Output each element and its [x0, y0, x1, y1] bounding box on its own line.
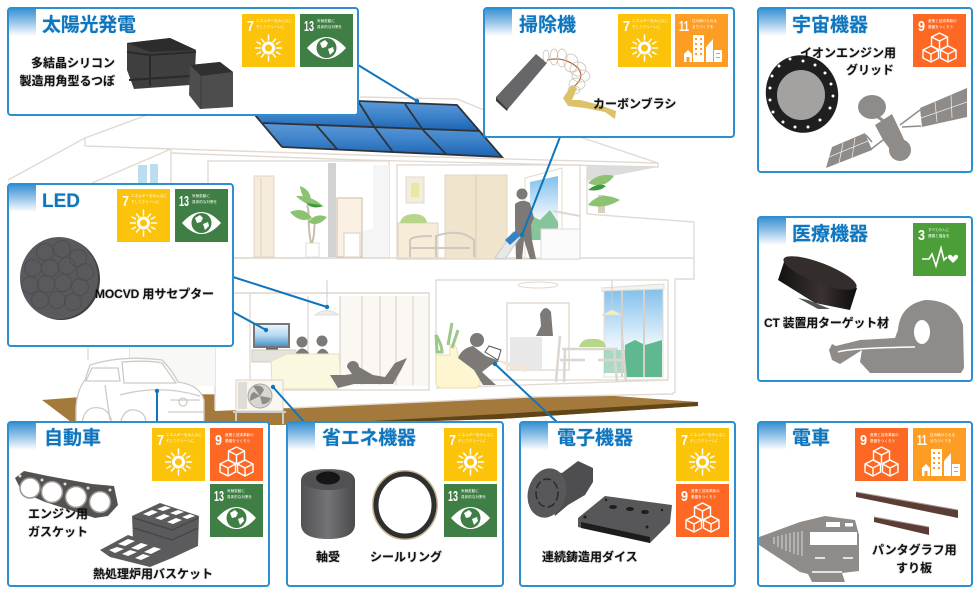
heading: medical equipment: 医療機器	[792, 223, 868, 245]
SDG 9: 産業と技術革新の	[870, 432, 899, 437]
SDG 9	[913, 14, 966, 67]
line: solar	[358, 65, 419, 103]
SDG 13	[175, 189, 228, 242]
balcony plant	[588, 175, 620, 213]
image: bearing	[301, 469, 355, 539]
dining room	[436, 280, 668, 388]
SDG 7: そしてクリーンに	[632, 24, 661, 29]
label: seal ring: シールリング	[370, 549, 442, 564]
SDG 7: 7	[247, 18, 254, 35]
SDG 7: エネルギーをみんなに	[632, 18, 668, 23]
image: seal ring	[373, 471, 437, 539]
SDG 7: エネルギーをみんなに	[458, 432, 494, 437]
SDG 9: 産業と技術革新の	[928, 18, 957, 23]
SDG 9: 9	[860, 432, 867, 449]
house walls and roof lines	[8, 97, 694, 410]
line: car	[155, 389, 159, 422]
line: vacuum	[520, 137, 560, 237]
label: gasket: エンジン用	[28, 507, 88, 521]
SDG 13: 気候変動に	[192, 193, 210, 198]
label: pantograph strip: パンタグラフ用	[872, 542, 957, 557]
label: carbon brush: カーボンブラシ	[593, 96, 676, 111]
SDG 9	[855, 428, 908, 481]
heading: solar power: 太陽光発電	[42, 14, 136, 36]
house illustration	[8, 97, 698, 425]
upper right room	[397, 165, 580, 259]
SDG 9: 基盤をつくろう	[691, 494, 716, 499]
SDG 11: 住み続けられる	[930, 432, 956, 437]
label: crucible: 多結晶シリコン	[31, 55, 115, 70]
SDG 3: 3	[918, 227, 925, 244]
person with laptop on armchair	[436, 323, 528, 388]
heading: electric train: 電車	[792, 427, 830, 449]
SDG 7: 7	[449, 432, 456, 449]
heading: energy-saving equipment: 省エネ機器	[322, 427, 416, 449]
SDG 7: エネルギーをみんなに	[166, 432, 202, 437]
SDG 13: 気候変動に	[461, 488, 479, 493]
SDG 9: 産業と技術革新の	[225, 432, 254, 437]
SDG 13: 13	[304, 18, 314, 35]
SDG 9	[210, 428, 263, 481]
SDG 11: 11	[917, 432, 927, 449]
SDG 3: すべての人に	[928, 227, 950, 232]
line: LED lamp	[233, 277, 329, 309]
SDG 9: 基盤をつくろう	[870, 438, 895, 443]
line: air conditioner	[271, 385, 305, 423]
SDG 9	[676, 484, 729, 537]
SDG 7	[117, 189, 170, 242]
panel: medical equipment	[758, 217, 972, 381]
SDG 7	[242, 14, 295, 67]
SDG 13	[444, 484, 497, 537]
heading: vacuum cleaner: 掃除機	[519, 13, 576, 36]
SDG 7: そしてクリーンに	[131, 199, 160, 204]
image: CT scanner	[829, 300, 964, 373]
SDG 11	[675, 14, 728, 67]
SDG 13: 具体的な対策を	[192, 199, 218, 204]
panel: space equipment	[757, 8, 972, 172]
image: cylindrical die	[522, 461, 593, 522]
image: heat treatment baskets	[100, 503, 199, 567]
family silhouettes and sofa	[271, 336, 407, 389]
panel: LED	[8, 184, 233, 346]
SDG 13: 13	[448, 488, 458, 505]
SDG 11: 11	[679, 18, 689, 35]
panel: electronic equipment	[520, 422, 735, 586]
SDG 7	[444, 428, 497, 481]
SDG 7	[152, 428, 205, 481]
SDG 7: 7	[122, 193, 129, 210]
heading: automobile: 自動車	[44, 427, 101, 449]
upper left room	[208, 161, 389, 258]
image: carbon brush	[496, 49, 616, 119]
SDG 7: そしてクリーンに	[166, 438, 195, 443]
image: pantograph strips	[856, 492, 958, 535]
SDG 3: 健康と福祉を	[928, 233, 950, 238]
SDG 7	[676, 428, 729, 481]
outdoor air conditioner	[233, 380, 286, 424]
label: basket: 熱処理炉用バスケット	[93, 566, 213, 581]
image: MOCVD susceptor	[20, 237, 100, 320]
SDG 9: 基盤をつくろう	[928, 24, 953, 29]
SDG 13: 具体的な対策を	[317, 24, 343, 29]
image: ion engine grid	[757, 47, 847, 141]
SDG 7: 7	[623, 18, 630, 35]
heading: space equipment: 宇宙機器	[792, 14, 868, 36]
label: bearing: 軸受	[316, 549, 340, 564]
image: train silhouette	[759, 516, 859, 582]
heading: LED: LED	[42, 191, 80, 212]
solar panels on roof	[255, 101, 502, 157]
line: LED TV	[233, 312, 268, 332]
image: engine gasket	[15, 471, 118, 518]
SDG 11: 住み続けられる	[692, 18, 718, 23]
SDG 7: そしてクリーンに	[690, 438, 719, 443]
SDG 13	[300, 14, 353, 67]
SDG 7: 7	[157, 432, 164, 449]
SDG 3	[913, 223, 966, 276]
SDG 13: 13	[214, 488, 224, 505]
SDG 13: 気候変動に	[227, 488, 245, 493]
SDG 7: 7	[681, 432, 688, 449]
heading: electronic equipment: 電子機器	[557, 427, 633, 449]
SDG 9: 9	[215, 432, 222, 449]
line: laptop	[493, 362, 558, 423]
panel: solar power	[8, 8, 358, 115]
SDG 7: そしてクリーンに	[458, 438, 487, 443]
panel: automobile	[8, 422, 269, 586]
panel: vacuum cleaner	[484, 8, 734, 137]
SDG 13: 具体的な対策を	[461, 494, 487, 499]
SDG 13: 具体的な対策を	[227, 494, 253, 499]
SDG 9: 9	[918, 18, 925, 35]
SDG 11: まちづくりを	[930, 438, 952, 443]
callout lines	[155, 65, 560, 423]
label: casting die: 連続鋳造用ダイス	[542, 549, 638, 564]
image: die plate	[578, 496, 672, 543]
label: susceptor: MOCVD 用サセプター	[95, 287, 214, 301]
SDG 9: 9	[681, 488, 688, 505]
SDG 13	[210, 484, 263, 537]
SDG 11: まちづくりを	[692, 24, 714, 29]
SDG 13: 13	[179, 193, 189, 210]
SDG 9: 基盤をつくろう	[225, 438, 250, 443]
panel: electric train: すり板	[896, 560, 932, 575]
image: CT target	[778, 250, 860, 310]
car	[76, 358, 204, 424]
image: square crucibles	[127, 38, 233, 109]
SDG 7: エネルギーをみんなに	[256, 18, 292, 23]
panel: energy-saving equipment	[287, 422, 503, 586]
potted plant	[290, 186, 327, 257]
SDG 11	[913, 428, 966, 481]
ground deck	[42, 386, 698, 425]
panel: space equipment: グリッド	[846, 62, 894, 77]
SDG 7	[618, 14, 671, 67]
SDG 13: 気候変動に	[317, 18, 335, 23]
SDG 9: 産業と技術革新の	[691, 488, 720, 493]
label: ion engine grid: イオンエンジン用	[800, 46, 896, 60]
SDG 7: エネルギーをみんなに	[690, 432, 726, 437]
SDG 7: エネルギーをみんなに	[131, 193, 167, 198]
panel: electric train	[758, 422, 972, 586]
vacuuming person	[495, 188, 536, 259]
living room	[250, 280, 429, 390]
television	[252, 323, 296, 362]
panel: solar power: 製造用角型るつぼ	[19, 73, 115, 88]
label: CT target: CT 装置用ターゲット材	[764, 315, 889, 330]
image: satellite	[826, 88, 967, 168]
panel: automobile: ガスケット	[28, 524, 88, 539]
SDG 7: そしてクリーンに	[256, 24, 285, 29]
